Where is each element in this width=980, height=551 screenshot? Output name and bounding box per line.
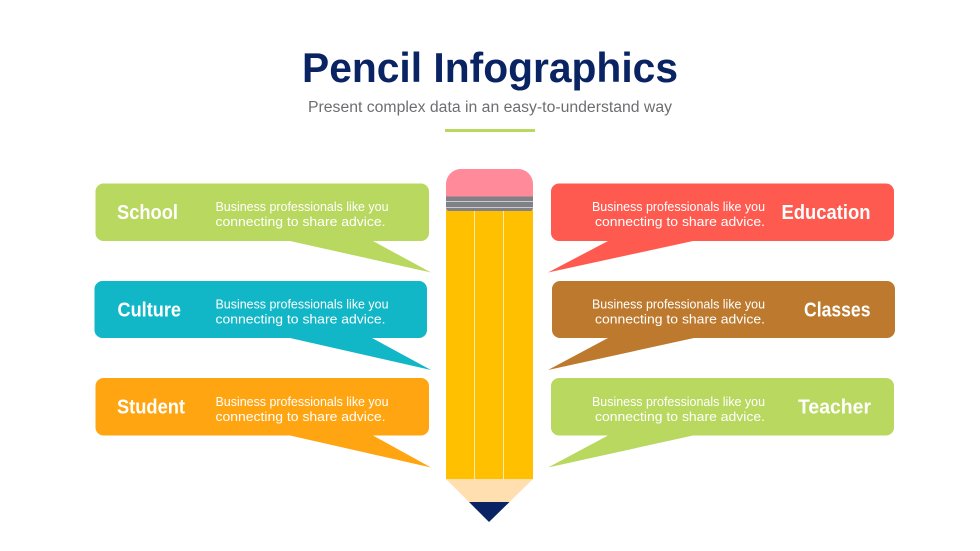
panel: Culture: connecting to share advice. [216, 312, 386, 326]
panel: Classes: Business professionals like you [592, 296, 765, 312]
subtitle: Present complex data in an easy-to-understand way [308, 99, 672, 116]
panel: Culture [94, 281, 431, 370]
panel: Classes: connecting to share advice. [595, 312, 765, 326]
panel: Teacher [548, 378, 894, 468]
panel: School: connecting to share advice. [216, 214, 386, 229]
panel: Student: Business professionals like you [216, 394, 388, 409]
panel: School: Business professionals like you [216, 199, 388, 214]
panel: School [96, 184, 431, 272]
panel: Culture: Business professionals like you [216, 296, 388, 312]
pencil lead [469, 502, 510, 522]
panel: Education: Business professionals like you [592, 199, 765, 214]
panel: Teacher: Teacher [798, 396, 871, 418]
panel: Student: connecting to share advice. [216, 409, 386, 424]
ferrule highlights [446, 201, 533, 208]
panel: Education: Education [782, 202, 870, 224]
panel: Teacher: connecting to share advice. [595, 409, 765, 424]
pencil body grooves [474, 211, 504, 479]
panel: Education: connecting to share advice. [595, 214, 765, 229]
panel: Student [96, 378, 431, 468]
panel: Education [548, 184, 894, 272]
panel: Culture: Culture [118, 300, 181, 322]
pencil ferrule [446, 196, 533, 211]
title underline [445, 129, 535, 132]
icon: pencil [446, 169, 533, 522]
panel: School: School [117, 202, 178, 224]
panel: Teacher: Business professionals like you [592, 394, 765, 409]
panel: Classes: Classes [804, 300, 870, 322]
panel: Student: Student [117, 396, 185, 418]
title: Pencil Infographics [302, 44, 678, 91]
pencil body [446, 210, 533, 479]
panel: Classes [548, 281, 895, 370]
pencil wood tip [446, 479, 533, 502]
pencil eraser [446, 169, 533, 197]
